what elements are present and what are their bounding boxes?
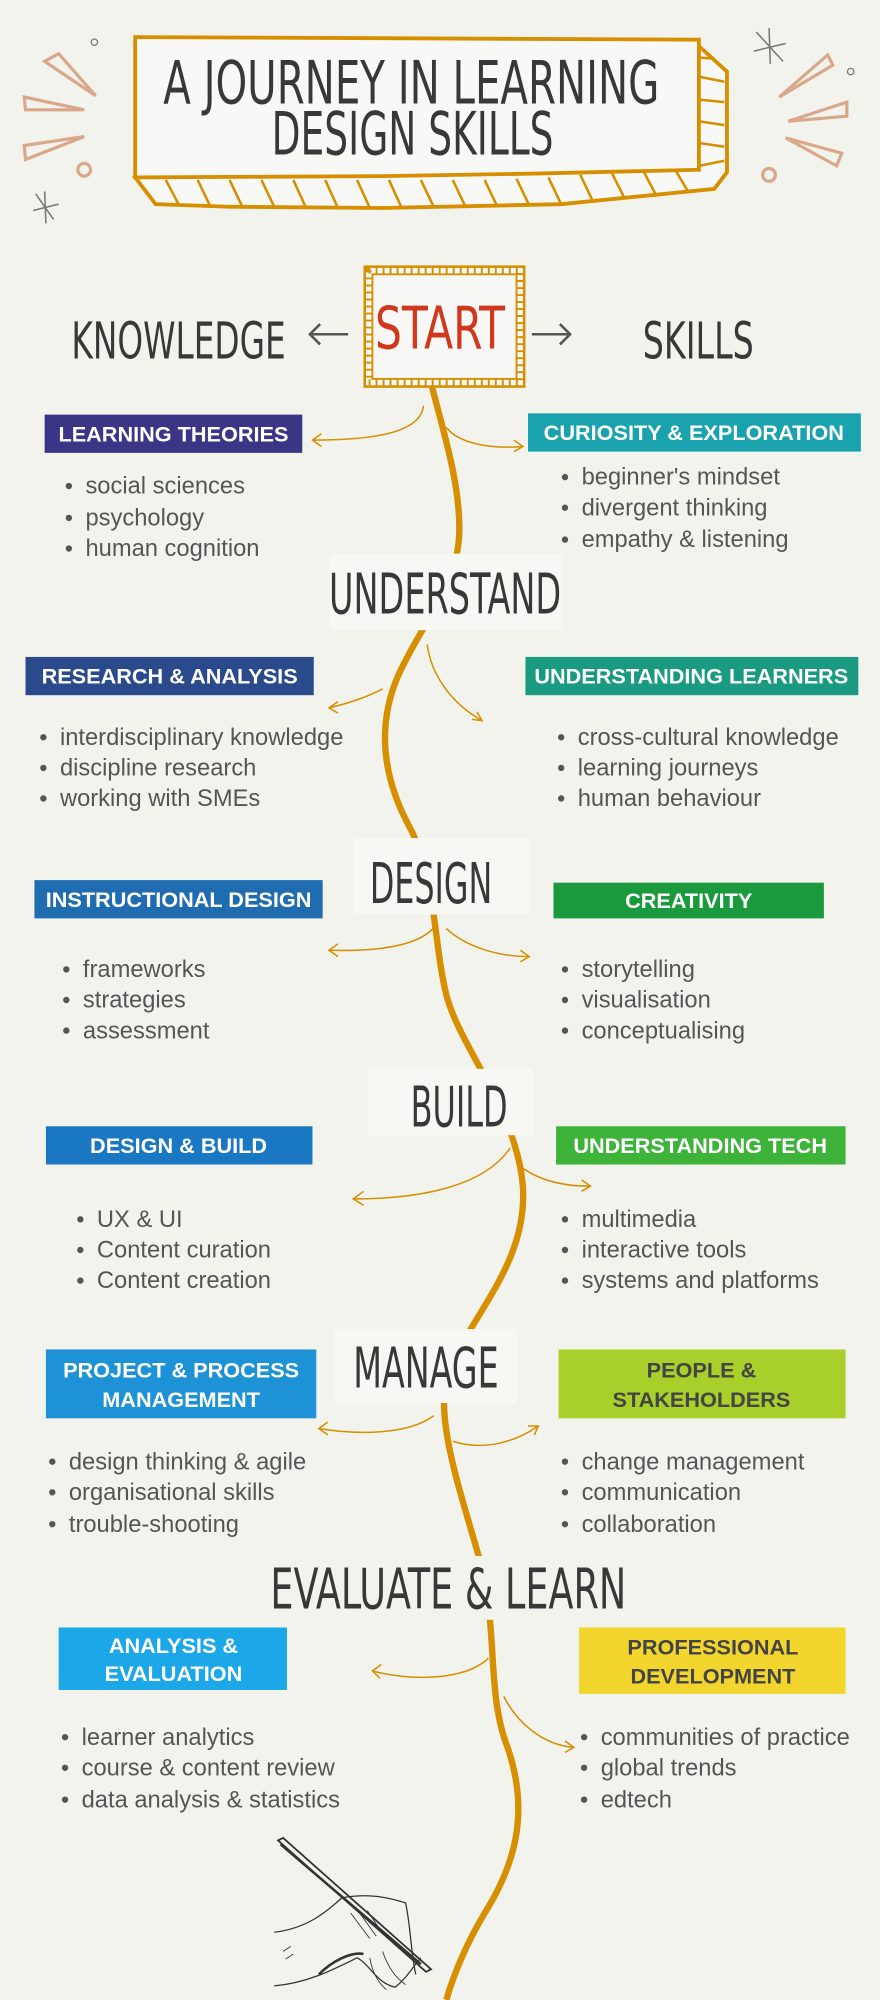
panel: professional development: PROFESSIONAL [627, 1634, 798, 1659]
panel: curiosity: CURIOSITY & EXPLORATION [544, 420, 844, 445]
panel: instructional design: INSTRUCTIONAL DESIGN [46, 887, 311, 912]
panel: design & build: UX & UI [97, 1207, 183, 1233]
panel: curiosity: empathy & listening [582, 527, 789, 553]
decorations: right [754, 28, 854, 181]
heading: design [355, 838, 529, 917]
arrows section 3 [329, 925, 529, 962]
panel: people & stakeholders [559, 1349, 846, 1538]
heading: manage [334, 1329, 517, 1403]
panel: understanding learners: UNDERSTANDING LEARNERS [534, 664, 848, 689]
panel: people & stakeholders: PEOPLE & [647, 1358, 756, 1383]
panel: people & stakeholders: change management [582, 1449, 805, 1475]
panel: learning theories [45, 415, 302, 562]
panel: project management [46, 1349, 316, 1538]
panel: analysis & evaluation: ANALYSIS & [109, 1633, 238, 1658]
arrow right [532, 324, 570, 344]
panel: research: RESEARCH & ANALYSIS [42, 664, 298, 689]
panel: analysis & evaluation: learner analytics [82, 1725, 254, 1751]
panel: learning theories: psychology [85, 506, 204, 532]
panel: understanding tech: multimedia [582, 1207, 697, 1233]
panel: professional development: edtech [601, 1787, 672, 1813]
panel: learning theories: social sciences [85, 474, 245, 500]
title box [135, 37, 727, 208]
panel: curiosity: divergent thinking [582, 495, 767, 521]
panel: professional development: global trends [601, 1755, 737, 1781]
panel: creativity: conceptualising [582, 1018, 745, 1044]
panel: instructional design: strategies [83, 988, 186, 1014]
heading: evaluate & learn: EVALUATE & LEARN [270, 1557, 626, 1622]
arrows section 2 [329, 644, 482, 721]
panel: project management: PROJECT & PROCESS [63, 1358, 299, 1383]
title text: A JOURNEY IN LEARNING [163, 48, 659, 118]
panel: understanding tech: systems and platforms [582, 1268, 819, 1294]
heading: build: BUILD [411, 1075, 508, 1140]
panel: research: working with SMEs [59, 786, 260, 812]
panel: learning theories: LEARNING THEORIES [58, 421, 288, 446]
panel: creativity: CREATIVITY [625, 888, 753, 913]
panel: understanding learners [525, 657, 858, 812]
panel: research: discipline research [60, 756, 256, 782]
panel: understanding tech [556, 1126, 846, 1294]
journey path [385, 383, 523, 2000]
panel: project management: design thinking & agile [69, 1449, 306, 1475]
panel: understanding learners: human behaviour [578, 786, 761, 812]
panel: instructional design: assessment [83, 1018, 210, 1044]
panel: understanding tech: interactive tools [582, 1238, 746, 1264]
arrows section 4 [353, 1148, 590, 1205]
panel: analysis & evaluation: course & content review [82, 1755, 336, 1781]
panel: learning theories: human cognition [85, 536, 260, 562]
panel: professional development: DEVELOPMENT [630, 1664, 795, 1689]
panel: analysis & evaluation [59, 1627, 340, 1813]
heading: understand [329, 554, 561, 630]
start box [365, 267, 524, 387]
panel: understanding learners: learning journeys [578, 756, 758, 782]
panel: curiosity [528, 413, 861, 553]
panel: project management: MANAGEMENT [102, 1387, 260, 1412]
panel: project management: organisational skills [69, 1480, 275, 1506]
panel: project management: trouble-shooting [69, 1512, 239, 1538]
title text [163, 48, 659, 169]
panel: creativity [554, 883, 824, 1044]
panel: people & stakeholders: collaboration [582, 1512, 716, 1538]
panel: creativity: storytelling [582, 957, 695, 983]
panel: curiosity: beginner's mindset [582, 465, 780, 491]
panel: design & build: DESIGN & BUILD [90, 1133, 267, 1158]
panel: professional development [579, 1627, 850, 1813]
title text: DESIGN SKILLS [272, 99, 554, 169]
skills heading: SKILLS [643, 312, 754, 371]
panel: people & stakeholders: STAKEHOLDERS [613, 1387, 790, 1412]
heading: understand: UNDERSTAND [329, 563, 561, 628]
panel: creativity: visualisation [582, 988, 711, 1014]
arrow left [310, 324, 348, 344]
decorations: left [24, 39, 98, 223]
panel: design & build: Content curation [97, 1238, 271, 1264]
arrows section 6 [372, 1658, 574, 1752]
heading: design: DESIGN [370, 852, 492, 917]
heading: manage: MANAGE [353, 1337, 499, 1402]
panel: design & build: Content creation [97, 1268, 271, 1294]
start box: START [375, 294, 506, 362]
panel: understanding learners: cross-cultural knowledge [578, 725, 839, 751]
panel: instructional design [34, 880, 323, 1044]
arrows section 5 [319, 1416, 538, 1445]
panel: professional development: communities of practice [601, 1725, 850, 1751]
heading: build [367, 1069, 533, 1140]
arrows section 1 [312, 406, 523, 452]
panel: understanding tech: UNDERSTANDING TECH [573, 1133, 827, 1158]
panel: research [26, 657, 343, 812]
panel: people & stakeholders: communication [582, 1480, 741, 1506]
panel: research: interdisciplinary knowledge [60, 725, 343, 751]
panel: analysis & evaluation: data analysis & statistics [82, 1787, 340, 1813]
panel: instructional design: frameworks [83, 957, 205, 983]
icon: hand with pen [274, 1838, 431, 1990]
knowledge heading: KNOWLEDGE [71, 312, 286, 371]
panel: analysis & evaluation: EVALUATION [105, 1661, 242, 1686]
panel: design & build [46, 1126, 312, 1294]
